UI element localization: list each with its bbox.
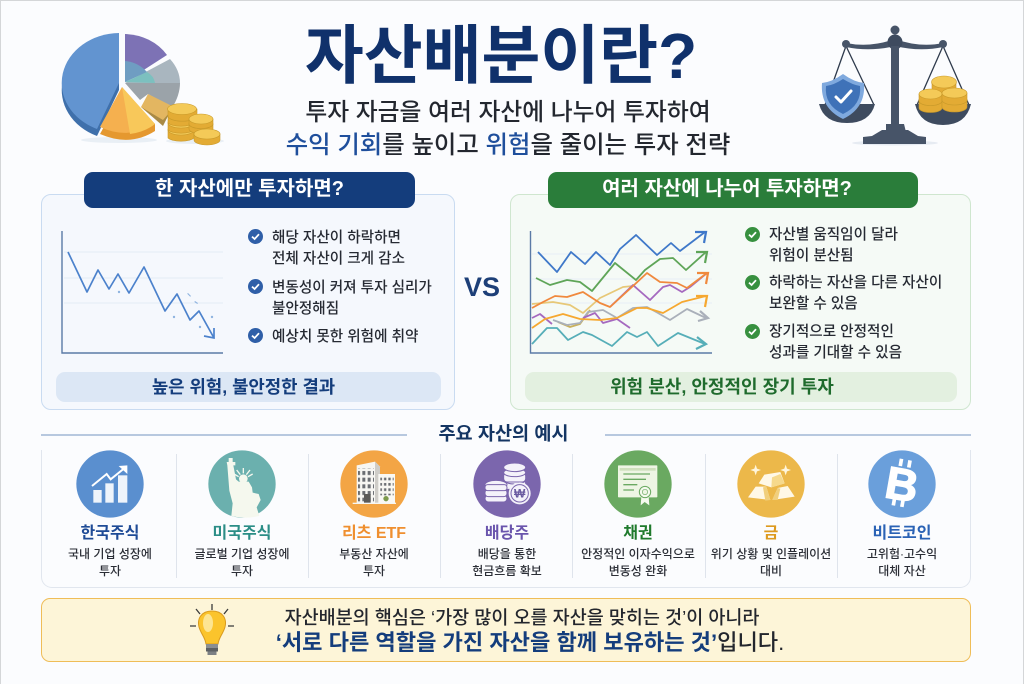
callout text line 2: ‘서로 다른 역할을 가진 자산을 함께 보유하는 것’입니다. [276,630,784,655]
description: 글로벌 기업 성장에 [194,546,290,560]
icon: rising bar chart [76,450,144,518]
section heading: asset examples: 주요 자산의 예시 [438,423,569,444]
icon: check [248,229,263,244]
description [472,546,542,578]
description: 국내 기업 성장에 [68,546,152,560]
chart: falling single asset line [61,231,223,354]
asset: REIT ETF [339,450,409,578]
label: 미국주식 [213,525,271,542]
description: 안정적인 이자수익으로 [581,546,695,560]
heading: diversified assets: 여러 자산에 나누어 투자하면? [602,178,852,200]
label: 리츠 ETF [342,525,406,542]
icon: light bulb [190,604,234,655]
icon: check [745,324,760,339]
bullet text: 해당 자산이 하락하면 [272,230,401,246]
heading: single asset: 한 자산에만 투자하면? [155,178,344,200]
icon: check [745,275,760,290]
heading: single asset [84,172,415,208]
asset: US stocks [194,450,290,578]
description: 대비 [760,564,782,578]
icon: coins with won [473,450,541,518]
bullet text: 변동성이 커져 투자 심리가 [272,280,432,296]
bullet text: 장기적으로 안정적인 [769,324,894,340]
icon: check [248,279,263,294]
list: single asset risks [248,229,432,345]
asset: gold [711,450,831,578]
description: 투자 [231,564,253,578]
icon: statue of liberty [208,450,276,518]
asset: dividend stocks [472,450,542,578]
description [194,546,290,578]
description [68,546,152,578]
bullet text: 예상치 못한 위험에 취약 [272,329,418,345]
description [867,546,937,578]
label: 채권 [623,525,653,542]
description: 부동산 자산에 [339,546,409,560]
bullet text [769,274,942,312]
panel: single asset [41,194,455,410]
chart: diversified multi-asset lines [530,230,712,354]
subtitle: 수익 기회를 높이고 위험을 줄이는 투자 전략 [286,132,730,159]
label: 금 [764,525,778,542]
result bar: high risk [56,372,441,402]
icon: balance scale with shield and coins [819,26,971,146]
description: 고위험·고수익 [867,546,937,560]
bullet text [272,230,405,266]
bullet text: 보완할 수 있음 [769,296,858,312]
asset: bonds [581,450,695,578]
description [339,546,409,578]
bullet text: 성과를 기대할 수 있음 [769,345,902,361]
label: 비트코인 [873,525,931,542]
bullet text [272,280,432,316]
result bar: diversified: 위험 분산, 안정적인 장기 투자 [610,377,834,397]
callout: key takeaway [41,598,971,662]
list: diversified benefits [745,226,942,361]
result bar: diversified [525,372,957,402]
description: 배당을 통한 [478,546,536,560]
label: 한국주식 [81,525,139,542]
result bar: high risk: 높은 위험, 불안정한 결과 [152,377,335,397]
description: 위기 상황 및 인플레이션 [711,546,831,560]
heading: diversified assets [548,172,918,208]
description: 현금흐름 확보 [472,564,542,578]
title: 자산배분이란? [305,20,697,92]
icon: gold bars [737,450,805,518]
asset: Korean stocks [68,450,152,578]
bullet text: 전체 자산이 크게 감소 [272,250,405,266]
icon: certificate [604,450,672,518]
icon: pie chart with coins [62,33,224,146]
subtitle: 투자 자금을 여러 자산에 나누어 투자하여 [305,99,711,126]
icon: bitcoin: B [881,457,922,512]
bullet text [769,324,902,361]
bullet text: 위험이 분산됨 [769,248,854,264]
description: 대체 자산 [878,564,926,578]
bullet text: 자산별 움직임이 달라 [769,227,898,243]
icon: check [745,227,760,242]
bullet text: 하락하는 자산을 다른 자산이 [769,275,942,291]
bullet text: 불안정해짐 [272,300,339,316]
description: 투자 [363,564,385,578]
subtitle [286,99,730,159]
description: 투자 [99,564,121,578]
icon: bitcoin [868,450,936,518]
description [711,546,831,578]
icon: coins with won: ₩ [514,487,526,501]
icon: check [248,328,263,343]
asset: bitcoin [867,450,937,578]
description: 변동성 완화 [609,564,667,578]
icon: buildings [340,450,408,518]
vs label: VS [464,272,500,302]
bullet text [769,226,898,264]
panel: diversified assets [510,194,971,410]
callout text line 1: 자산배분의 핵심은 ‘가장 많이 오를 자산을 맞히는 것’이 아니라 [285,607,759,628]
label: 배당주 [485,525,529,542]
description [581,546,695,578]
